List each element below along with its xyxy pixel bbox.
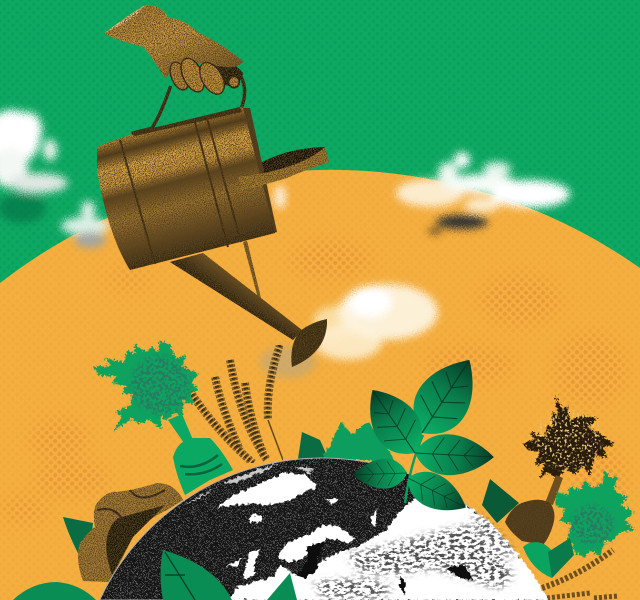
- leaf: right triangular: [482, 479, 519, 523]
- carrot foliage shade: [130, 355, 190, 415]
- finger: thumb tip: [229, 76, 239, 88]
- carrot root shading: [180, 455, 222, 474]
- right carrot foliage: [555, 470, 635, 558]
- plant stem: [405, 435, 423, 503]
- leaf: top: [400, 346, 492, 447]
- cloud: far left: [0, 110, 68, 223]
- carrot: left green: [93, 340, 233, 495]
- can spout strut: [243, 241, 261, 298]
- Scandinavia: [278, 525, 355, 562]
- finger: ring: [166, 59, 192, 93]
- right carrot stem and root: [523, 542, 555, 578]
- leaf: right: [414, 433, 495, 478]
- leaf: upper left: [354, 377, 434, 466]
- hand back: [104, 5, 243, 78]
- can rear band: [238, 147, 329, 191]
- hand grip shadow: [205, 58, 243, 87]
- land masses, drawn at 3x: [185, 463, 548, 600]
- wheat stalks: [187, 345, 283, 463]
- cloud: behind can: [274, 185, 286, 209]
- cabbage: [78, 483, 183, 582]
- carrot: right brown foliage: [523, 395, 615, 480]
- Novaya Zemlya: [371, 508, 378, 527]
- finger: index: [195, 58, 229, 98]
- can rear rim: [243, 108, 277, 236]
- cloud: centre, under the spout: [260, 284, 438, 378]
- carrot: right brown stem: [545, 475, 563, 505]
- Eurasia: [230, 498, 548, 600]
- wheat: bottom right: [542, 550, 618, 598]
- can handle: [132, 75, 245, 133]
- leaf: lower left: [353, 458, 408, 490]
- hand cut edge: [104, 5, 145, 33]
- Greenland: [215, 473, 318, 509]
- cloud: small left: [61, 201, 109, 248]
- leaf: globe lower left: [160, 550, 232, 600]
- right carrot foliage shade: [570, 505, 614, 545]
- Iceland: [248, 515, 262, 523]
- UK: [227, 549, 260, 579]
- watering can: [97, 5, 329, 367]
- cabbage leaf behind: [63, 517, 93, 572]
- can ring bands: [120, 118, 241, 264]
- carrot foliage: [93, 340, 199, 431]
- carrot: right green: [523, 470, 635, 578]
- cloud: right: [396, 152, 570, 234]
- leaf: globe lower centre: [267, 573, 297, 600]
- finger: middle: [176, 55, 209, 95]
- earth globe: [100, 458, 548, 600]
- seas: [295, 541, 473, 595]
- leaf: back of earth, left: [298, 432, 328, 459]
- Svalbard: [325, 498, 338, 506]
- leaf: bottom left: [13, 582, 96, 600]
- can top strap: [131, 107, 242, 136]
- can rose: [291, 319, 327, 367]
- carrot root: [173, 438, 233, 495]
- carrot stem: [168, 414, 193, 443]
- foliage mound: back of earth: [322, 422, 395, 462]
- can handle and hand, drawn at 3x: [104, 5, 245, 133]
- ocean: [100, 458, 544, 600]
- can mouth interior: [250, 147, 325, 178]
- can body: [97, 108, 275, 270]
- carrot: right brown root: [505, 500, 554, 545]
- Arctic streaks: [185, 463, 313, 505]
- sprouting plant: [353, 346, 495, 522]
- leaf: lower right: [400, 463, 474, 522]
- background: orange planet disc: [0, 170, 640, 600]
- can spout: [170, 253, 302, 340]
- mottled dark land: [313, 512, 517, 598]
